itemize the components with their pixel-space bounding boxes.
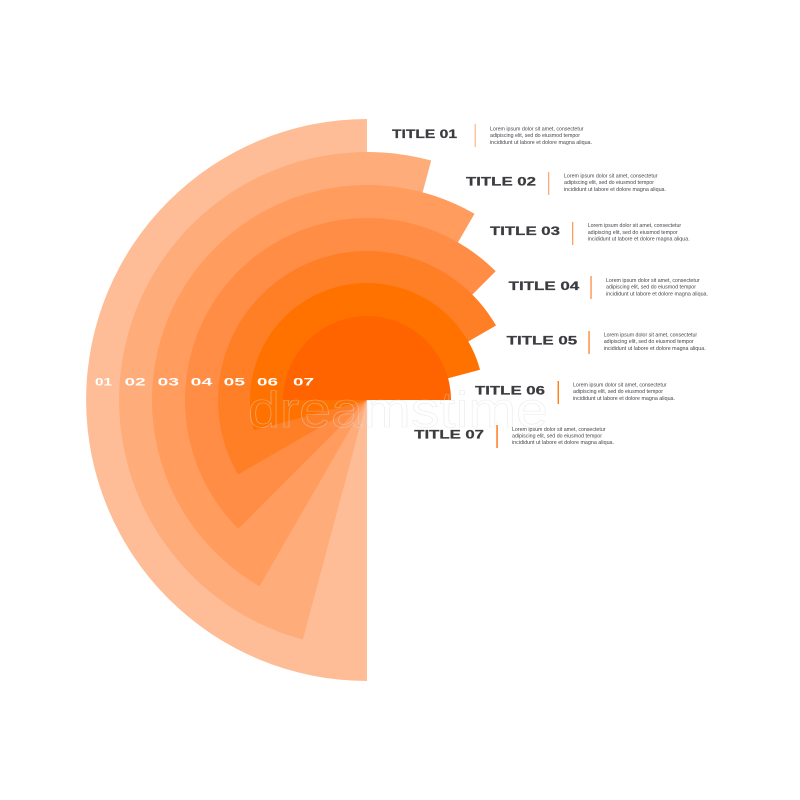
heading: title 05: TITLE 05 <box>507 333 578 347</box>
number 06: 06 <box>257 377 278 389</box>
description 07: incididunt ut labore et dolore magna aliqua. <box>512 440 614 446</box>
sector 07 <box>283 316 451 400</box>
watermark: dreamstime <box>248 382 548 438</box>
divider bar 06 <box>558 381 559 404</box>
description 06: adipiscing elit, sed do eiusmod tempor <box>573 389 663 395</box>
sector 01 <box>86 119 367 681</box>
label block 03 <box>490 222 690 245</box>
description 01: Lorem ipsum dolor sit amet, consectetur <box>490 127 584 133</box>
description 04 <box>606 278 708 297</box>
description 02: incididunt ut labore et dolore magna aliqua. <box>564 187 666 193</box>
number 07: 07 <box>293 377 314 389</box>
label block 02 <box>466 172 666 195</box>
heading: title 01: TITLE 01 <box>392 127 457 141</box>
description 07: Lorem ipsum dolor sit amet, consectetur <box>512 427 606 433</box>
description 06: incididunt ut labore et dolore magna aliqua. <box>573 396 675 402</box>
label block 05 <box>507 331 706 354</box>
description 02: adipiscing elit, sed do eiusmod tempor <box>564 180 654 186</box>
heading: title 03: TITLE 03 <box>490 224 560 238</box>
number 02: 02 <box>125 377 146 389</box>
label block 07 <box>414 425 614 448</box>
label block 06 <box>475 381 675 404</box>
number 01: 01 <box>95 377 112 389</box>
sector 05 <box>163 196 496 474</box>
sector 03 <box>73 106 474 586</box>
number 03: 03 <box>158 377 179 389</box>
divider bar 01 <box>475 124 476 147</box>
sector 06 <box>224 257 480 430</box>
description 05: adipiscing elit, sed do eiusmod tempor <box>604 339 694 345</box>
description 02: Lorem ipsum dolor sit amet, consectetur <box>564 174 658 180</box>
description 06 <box>573 383 675 402</box>
heading: title 07: TITLE 07 <box>414 427 484 441</box>
description 05 <box>604 333 706 352</box>
heading: title 02: TITLE 02 <box>466 174 536 188</box>
description 02 <box>564 174 666 193</box>
number 05: 05 <box>224 377 245 389</box>
description 01 <box>490 127 592 146</box>
description 05: incididunt ut labore et dolore magna aliqua. <box>604 346 706 352</box>
divider bar 05 <box>588 331 590 354</box>
description 03: Lorem ipsum dolor sit amet, consectetur <box>588 223 681 229</box>
description 04: adipiscing elit, sed do eiusmod tempor <box>606 285 696 291</box>
description 06: Lorem ipsum dolor sit amet, consectetur <box>573 383 667 389</box>
heading: title 06: TITLE 06 <box>475 383 545 397</box>
description 07: adipiscing elit, sed do eiusmod tempor <box>512 434 602 440</box>
sector 04 <box>110 143 496 529</box>
description 01: incididunt ut labore et dolore magna aliqua. <box>490 140 592 146</box>
number 04: 04 <box>191 377 214 389</box>
description 07 <box>512 427 614 446</box>
divider bar 03 <box>572 222 573 245</box>
description 03 <box>588 223 690 243</box>
description 04: incididunt ut labore et dolore magna aliqua. <box>606 291 708 297</box>
description 04: Lorem ipsum dolor sit amet, consectetur <box>606 278 700 284</box>
divider bar 04 <box>590 276 592 299</box>
description 03: incididunt ut labore et dolore magna aliqua. <box>588 237 690 243</box>
divider bar 02 <box>548 172 549 195</box>
label block 01 <box>392 124 592 147</box>
sector 02 <box>63 96 431 640</box>
chart: nested rotated semicircles <box>63 96 496 681</box>
description 05: Lorem ipsum dolor sit amet, consectetur <box>604 333 697 339</box>
label block 04 <box>509 276 708 299</box>
divider bar 07 <box>496 425 498 448</box>
description 03: adipiscing elit, sed do eiusmod tempor <box>588 230 678 236</box>
sector numbers <box>95 377 314 389</box>
description 01: adipiscing elit, sed do eiusmod tempor <box>490 133 580 139</box>
heading: title 04: TITLE 04 <box>509 279 580 293</box>
